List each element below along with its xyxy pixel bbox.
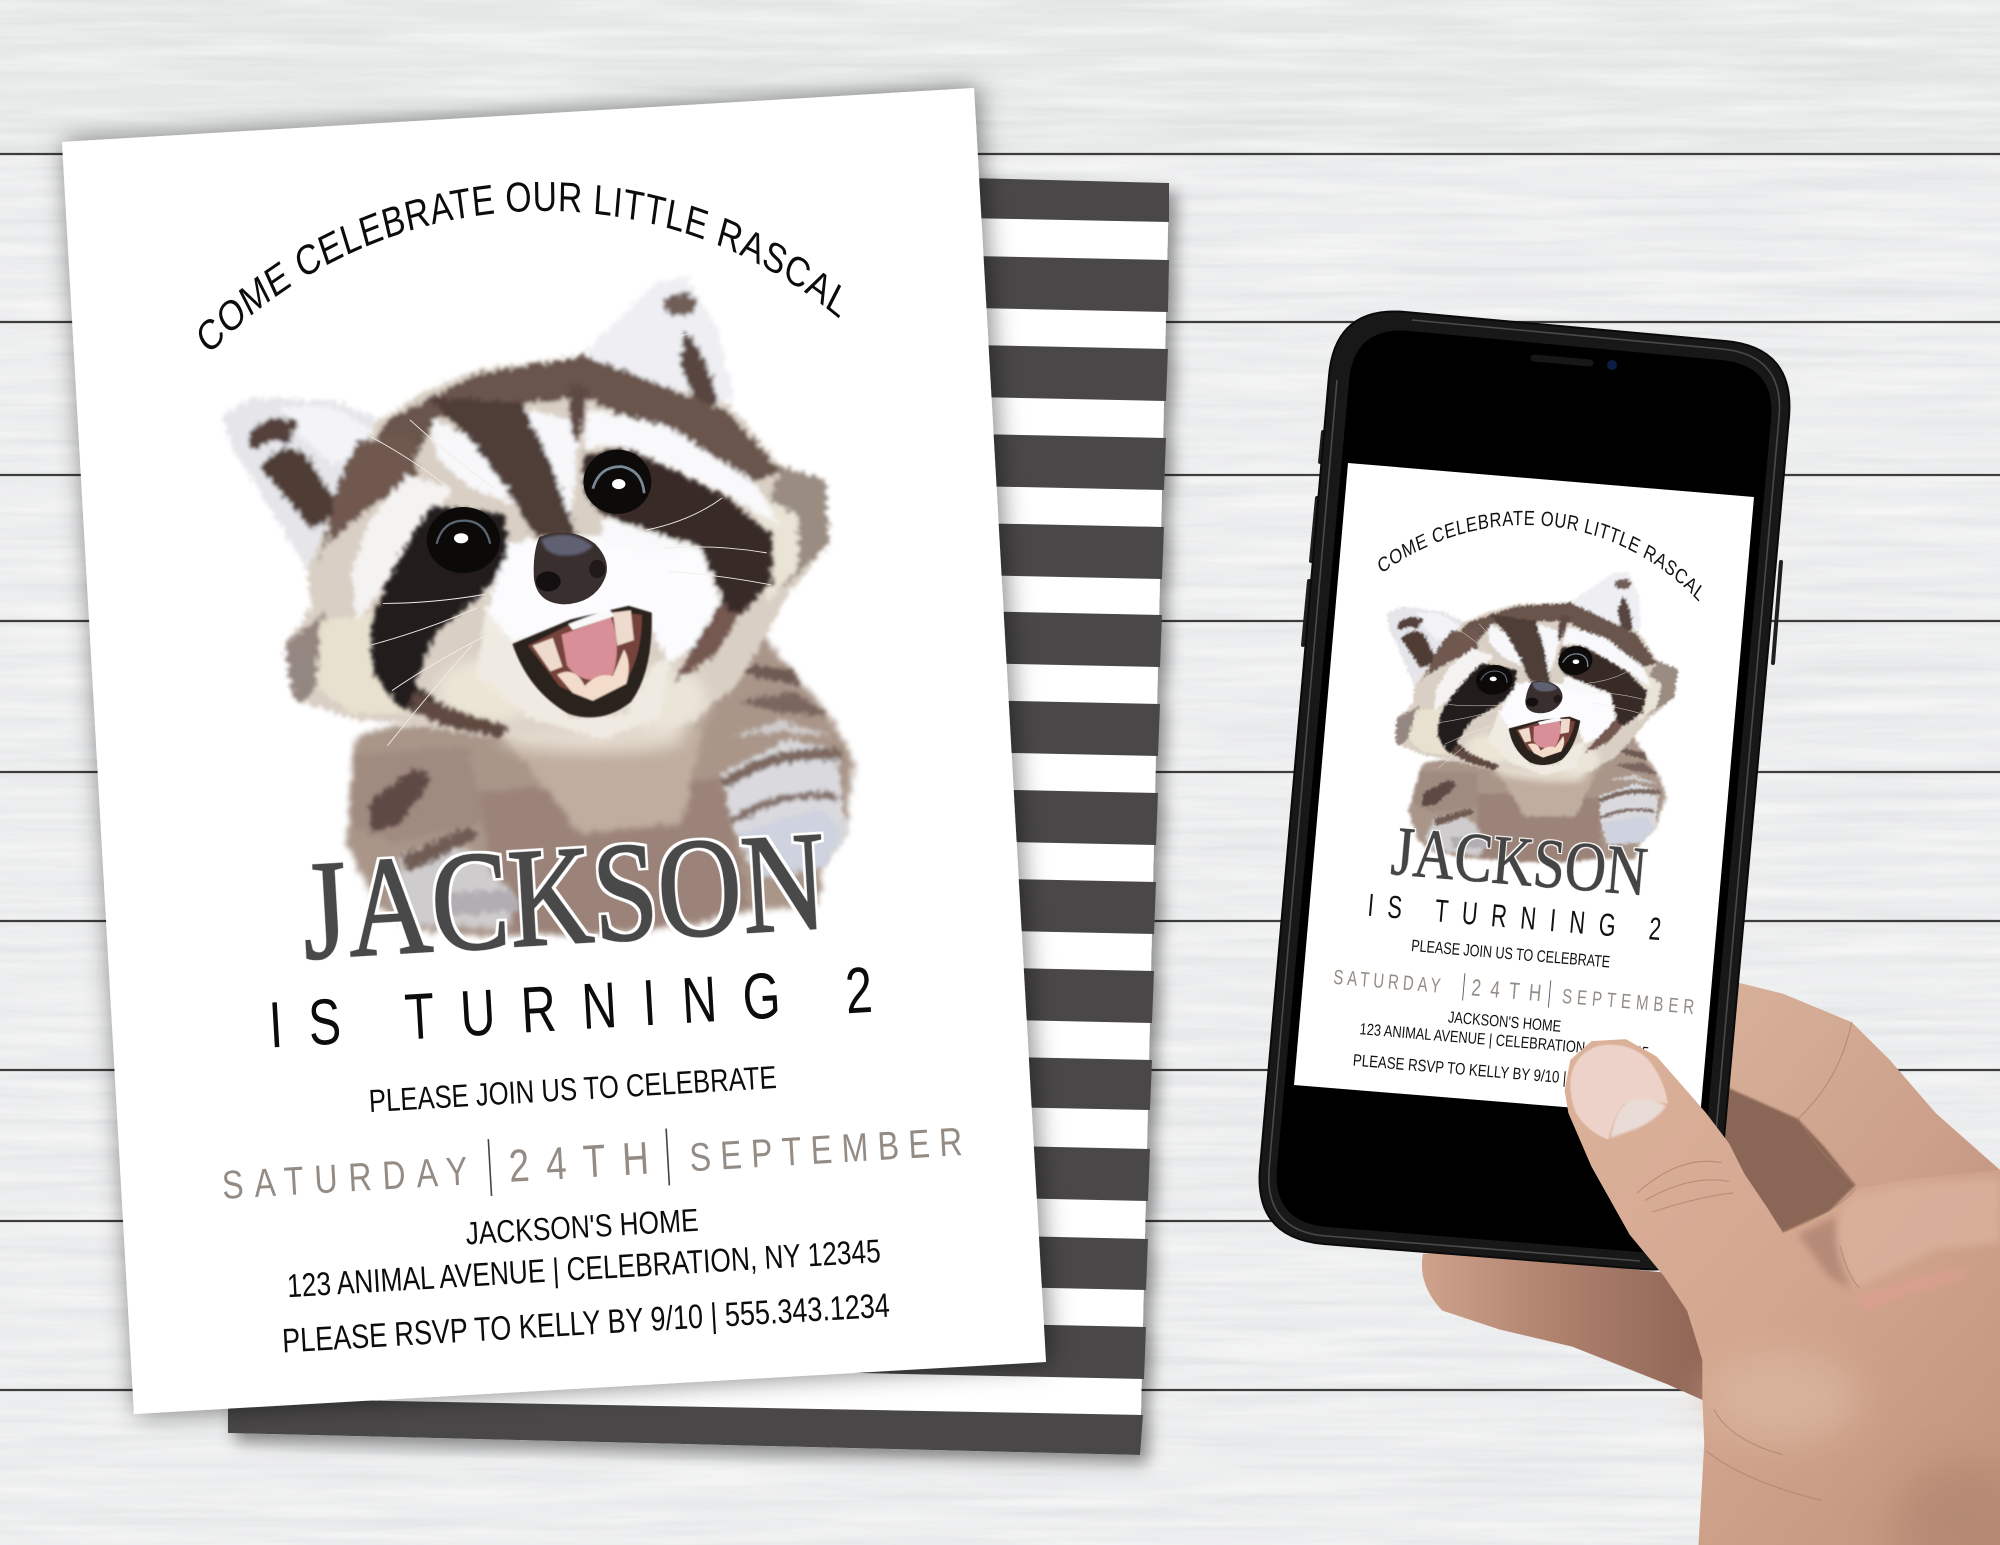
back of invitation card: black and white stripes <box>228 160 1169 1455</box>
phone <box>1260 312 1789 1269</box>
phone is turning 2: IS TURNING 2 <box>1366 887 1663 947</box>
phone address: 123 ANIMAL AVENUE | CELEBRATION, NY 12345 <box>1359 1021 1650 1062</box>
side buttons <box>1303 432 1781 663</box>
raccoon illustration on card <box>222 278 854 936</box>
address: 123 ANIMAL AVENUE | CELEBRATION, NY 12345 <box>286 1232 882 1304</box>
phone screen <box>1277 331 1771 1252</box>
date <box>221 1113 963 1209</box>
phone curved heading: COME CELEBRATE OUR LITTLE RASCAL <box>1378 510 1702 602</box>
date: 24TH <box>507 1132 650 1192</box>
invitation card text <box>198 182 963 1361</box>
curved heading: COME CELEBRATE OUR LITTLE RASCAL <box>198 182 842 350</box>
is turning 2: IS TURNING 2 <box>267 954 874 1062</box>
phone please join: PLEASE JOIN US TO CELEBRATE <box>1411 937 1611 972</box>
speaker <box>1534 358 1590 363</box>
please join: PLEASE JOIN US TO CELEBRATE <box>368 1059 778 1119</box>
lower finger <box>1422 1254 1706 1402</box>
nail lunula <box>1610 1099 1666 1138</box>
phone date: SATURDAY <box>1332 966 1442 997</box>
upper finger <box>1721 980 2000 1314</box>
date: SATURDAY <box>221 1148 469 1208</box>
phone venue: JACKSON'S HOME <box>1447 1009 1562 1036</box>
knuckle wrinkles <box>1637 1022 1859 1500</box>
name: JACKSON <box>298 801 830 990</box>
hand fingers behind phone <box>1422 980 2000 1402</box>
thumb nail <box>1570 1045 1668 1140</box>
phone date: 24TH <box>1470 975 1542 1007</box>
dark lower right <box>1894 1462 2000 1545</box>
camera <box>1607 360 1617 370</box>
front invitation card <box>62 88 1046 1414</box>
phone body <box>1260 312 1789 1269</box>
date: SEPTEMBER <box>688 1119 963 1180</box>
knuckle highlight <box>1706 1352 1859 1443</box>
stripes <box>228 160 1169 1455</box>
phone invitation text <box>1332 510 1725 1138</box>
invitation on screen <box>1294 463 1754 1118</box>
hand and thumb in front of phone <box>1565 1022 2000 1545</box>
venue: JACKSON'S HOME <box>465 1202 699 1252</box>
phone date <box>1332 963 1695 1020</box>
palm <box>1565 1039 2000 1545</box>
shaded finger gap <box>1721 1087 1855 1233</box>
phone date: SEPTEMBER <box>1561 985 1695 1018</box>
phone name: JACKSON <box>1388 814 1650 911</box>
rim highlight <box>1269 320 1780 1261</box>
palm soft shading <box>1798 1178 2000 1311</box>
phone date dividers <box>1463 973 1551 1008</box>
date dividers <box>488 1129 669 1196</box>
phone rsvp: PLEASE RSVP TO KELLY BY 9/10 | 555.343.1234 <box>1352 1052 1652 1095</box>
raccoon illustration on phone <box>1339 552 1711 875</box>
rsvp: PLEASE RSVP TO KELLY BY 9/10 | 555.343.1234 <box>281 1287 891 1361</box>
